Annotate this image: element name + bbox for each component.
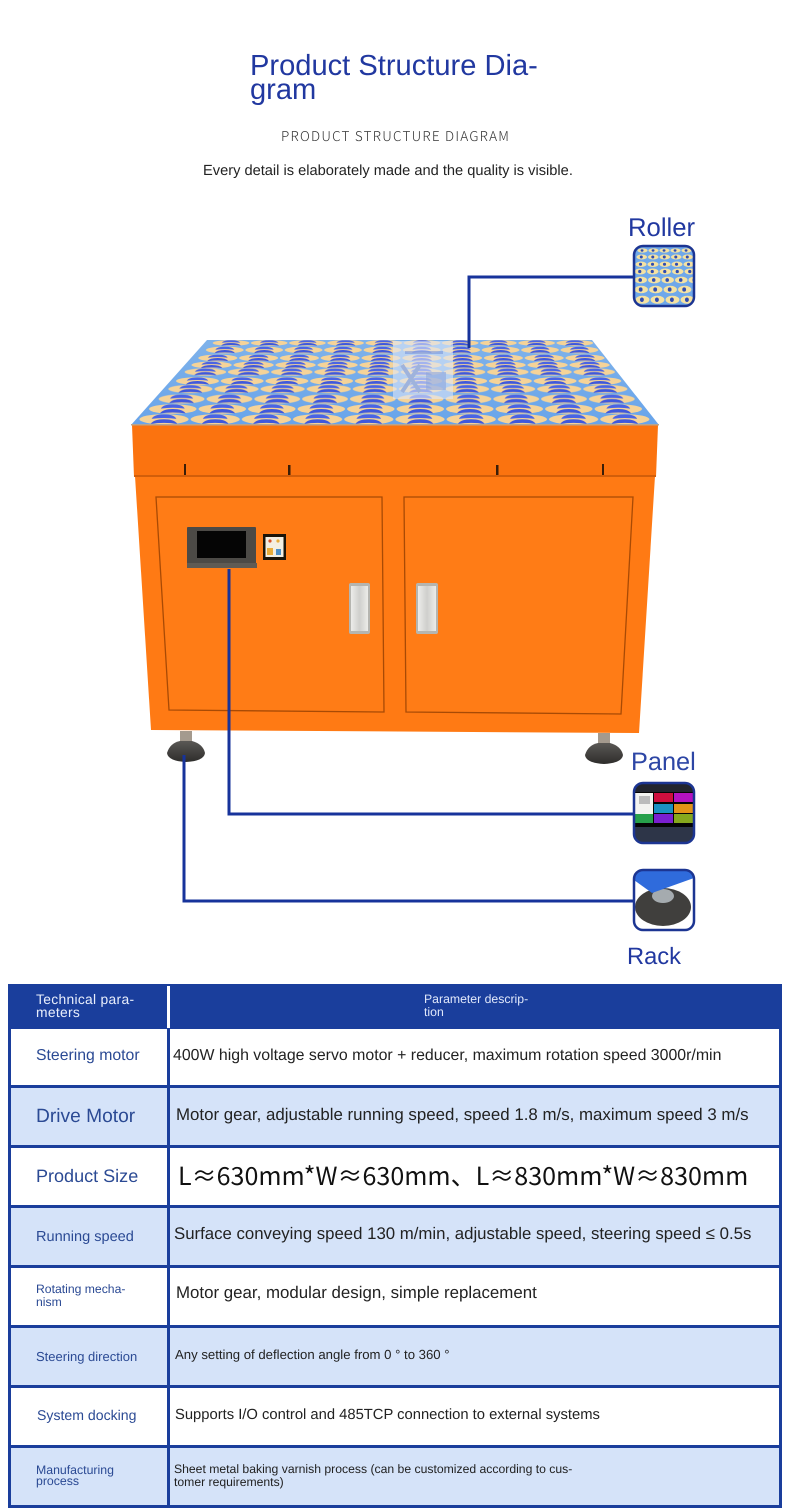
- left foot: [167, 731, 205, 762]
- row: manufacturing process: Manufacturing: [36, 1463, 114, 1477]
- row: manufacturing process: Sheet metal baking varnish process (can be customized according to cus-: [174, 1462, 572, 1476]
- title: [250, 50, 538, 106]
- row: product size: Product Size: [36, 1166, 138, 1186]
- watermark patch: [393, 341, 453, 399]
- row: rotating mechanism: Motor gear, modular design, simple replacement: [176, 1283, 537, 1302]
- panel label: Panel: [631, 748, 696, 776]
- right foot: [585, 733, 623, 764]
- row: rotating mechanism: [11, 1268, 779, 1325]
- right door: [404, 497, 633, 714]
- row: drive motor: Motor gear, adjustable running speed, speed 1.8 m/s, maximum speed 3 m/s: [176, 1105, 749, 1124]
- roller surface: [131, 340, 659, 426]
- header: parameter description: tion: [424, 1005, 444, 1019]
- leader line: panel: [229, 569, 634, 814]
- housing slots: [184, 464, 604, 475]
- upper housing: [132, 425, 658, 477]
- rack label: Rack: [627, 944, 681, 970]
- parameters table: [8, 984, 782, 1508]
- row: running speed: Running speed: [36, 1229, 134, 1245]
- product diagram: [131, 214, 696, 970]
- row: manufacturing process: tomer requirements): [174, 1475, 284, 1489]
- leader line: rack: [184, 755, 634, 901]
- row: steering motor: Steering motor: [36, 1047, 140, 1064]
- header: technical parameters: meters: [36, 1004, 80, 1020]
- row: product size: L≈630mm*W≈630mm、L≈830mm*W≈830mm: [178, 1157, 748, 1193]
- right handle: [416, 583, 438, 634]
- leader line: roller: [469, 277, 634, 348]
- touch screen: [187, 527, 257, 568]
- header: parameter description: Parameter descrip-: [424, 992, 528, 1006]
- row: running speed: Surface conveying speed 130 m/min, adjustable speed, steering speed ≤ 0.5s: [174, 1224, 751, 1243]
- row: manufacturing process: [11, 1448, 779, 1505]
- row: rotating mechanism: Rotating mecha-: [36, 1282, 125, 1296]
- roller thumbnail: [634, 246, 696, 306]
- left handle: [349, 583, 370, 634]
- header divider: [167, 986, 170, 1028]
- row: steering motor: 400W high voltage servo motor + reducer, maximum rotation speed 3000r/min: [173, 1047, 721, 1064]
- row: running speed: [11, 1208, 779, 1265]
- row: system docking: System docking: [37, 1407, 136, 1423]
- left door: [156, 497, 384, 712]
- row: steering motor: [11, 1029, 779, 1085]
- header: technical parameters: Technical para-: [36, 991, 134, 1007]
- row: manufacturing process: process: [36, 1474, 79, 1488]
- roller label: Roller: [628, 214, 696, 242]
- panel thumbnail: [634, 783, 694, 843]
- row: product size: [11, 1148, 779, 1205]
- row: steering direction: Steering direction: [36, 1349, 137, 1364]
- row: steering direction: [11, 1328, 779, 1385]
- row: drive motor: Drive Motor: [36, 1106, 135, 1127]
- subtitle: PRODUCT STRUCTURE DIAGRAM: [281, 125, 510, 145]
- title: Product Structure Dia-: [250, 50, 538, 82]
- header: technical parameters: [36, 991, 134, 1020]
- title: gram: [250, 74, 316, 106]
- lower body: [135, 476, 655, 733]
- row: system docking: [11, 1388, 779, 1445]
- row: drive motor: [11, 1088, 779, 1145]
- header: parameter description: [424, 992, 528, 1019]
- tagline: Every detail is elaborately made and the quality is visible.: [203, 163, 573, 179]
- machine cabinet: [132, 425, 658, 733]
- row: system docking: Supports I/O control and 485TCP connection to external systems: [175, 1407, 600, 1423]
- rack thumbnail: [634, 870, 694, 930]
- row: steering direction: Any setting of deflection angle from 0 ° to 360 °: [175, 1347, 450, 1362]
- row: rotating mechanism: nism: [36, 1295, 62, 1309]
- sticker: [263, 534, 286, 560]
